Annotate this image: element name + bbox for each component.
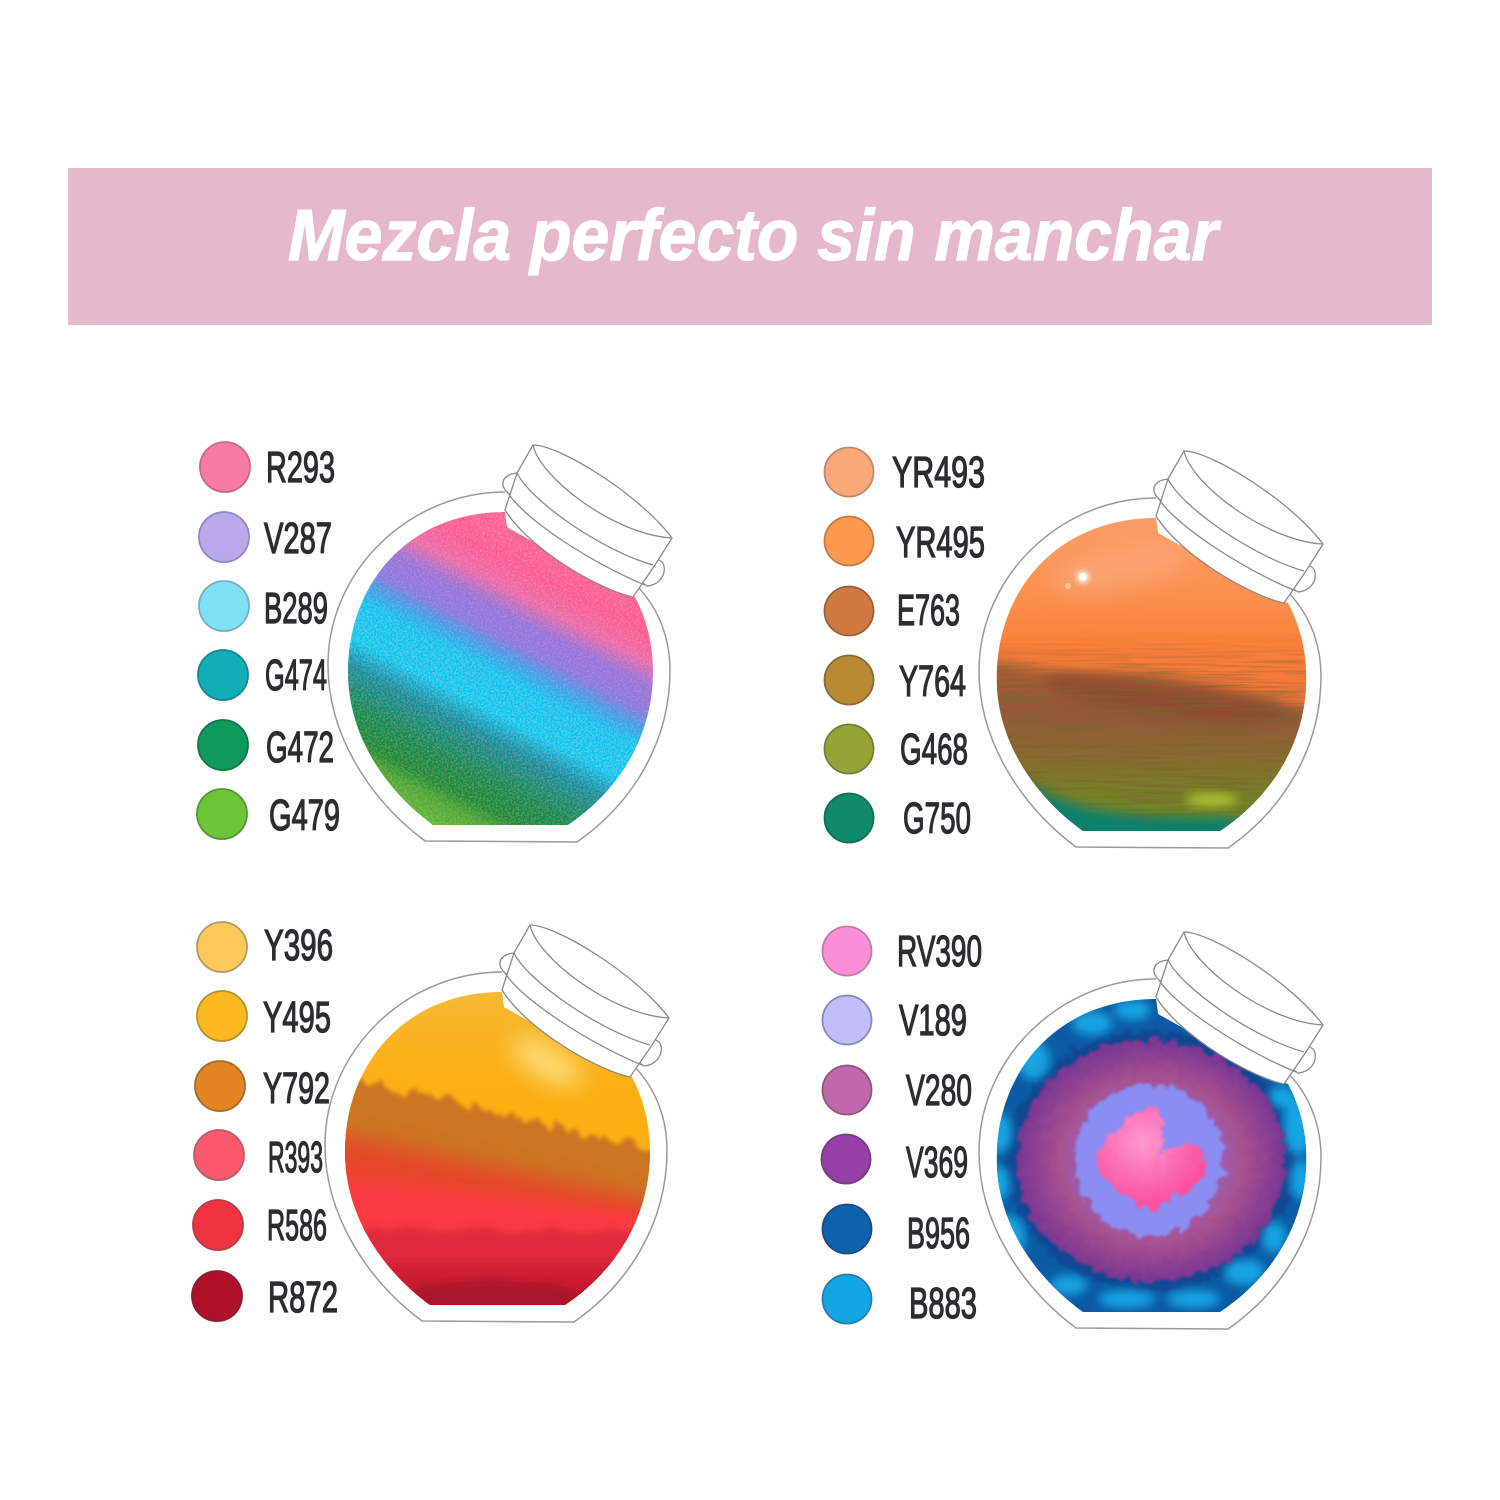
swatch Y792	[195, 1061, 330, 1113]
swatch V287	[199, 512, 332, 563]
swatch RV390	[822, 926, 982, 976]
swatch R872: R872	[268, 1273, 338, 1322]
swatch RV390: RV390	[897, 927, 982, 976]
swatch R393: R393	[268, 1133, 323, 1182]
swatch Y792: Y792	[263, 1064, 330, 1113]
swatch G468: G468	[900, 725, 968, 774]
jar: orange to olive to teal	[978, 451, 1324, 856]
swatch G750: G750	[903, 794, 971, 843]
swatch B883	[822, 1274, 977, 1328]
swatch G472: G472	[266, 723, 334, 772]
swatch V280: V280	[906, 1066, 972, 1115]
swatch YR493: YR493	[892, 448, 985, 497]
swatch Y764	[824, 656, 966, 706]
swatch G474: G474	[265, 651, 327, 700]
swatch YR495	[824, 516, 985, 567]
swatch B289: B289	[264, 584, 328, 633]
swatch G479	[197, 789, 340, 840]
swatch R393	[194, 1130, 323, 1182]
swatch R293	[200, 442, 335, 492]
swatch V189: V189	[899, 996, 967, 1045]
panel: radial pink and blue jar mix	[822, 926, 1323, 1329]
swatch B289	[199, 581, 328, 633]
swatch G468	[824, 724, 968, 774]
swatch Y396: Y396	[264, 921, 333, 970]
swatch B956: B956	[907, 1209, 970, 1258]
swatch R293: R293	[266, 443, 335, 492]
swatch B883: B883	[909, 1279, 977, 1328]
swatch Y764: Y764	[899, 657, 966, 706]
title: Mezcla perfecto sin manchar	[288, 196, 1222, 276]
swatch Y495: Y495	[263, 993, 331, 1042]
swatch G474	[198, 650, 327, 700]
swatch V280	[822, 1066, 972, 1115]
swatch YR495: YR495	[896, 518, 985, 567]
jar: diagonal pink to green bands	[328, 445, 672, 842]
swatch R586: R586	[267, 1201, 327, 1250]
swatch Y396	[197, 921, 333, 972]
swatch G472	[198, 720, 334, 772]
swatch R586	[193, 1200, 327, 1250]
swatch R872	[192, 1271, 338, 1322]
jar: radial heart bloom	[979, 932, 1323, 1329]
swatch Y495	[197, 991, 331, 1042]
heading banner	[68, 168, 1432, 325]
jar: yellow, amber, red layers	[317, 925, 677, 1330]
highlight	[1065, 571, 1089, 589]
swatch YR493	[824, 448, 985, 497]
swatch V287: V287	[264, 514, 332, 563]
panel: orange jar mix	[824, 448, 1324, 856]
swatch G479: G479	[269, 791, 340, 840]
swatch B956	[822, 1204, 970, 1258]
panel: rainbow jar mix	[197, 442, 672, 842]
swatch E763	[824, 586, 960, 636]
swatch V369	[822, 1134, 968, 1187]
swatch V369: V369	[906, 1138, 968, 1187]
swatch E763: E763	[897, 586, 960, 635]
swatch V189	[822, 996, 967, 1045]
panel: yellow to red jar mix	[192, 921, 677, 1330]
swatch G750	[824, 794, 971, 843]
